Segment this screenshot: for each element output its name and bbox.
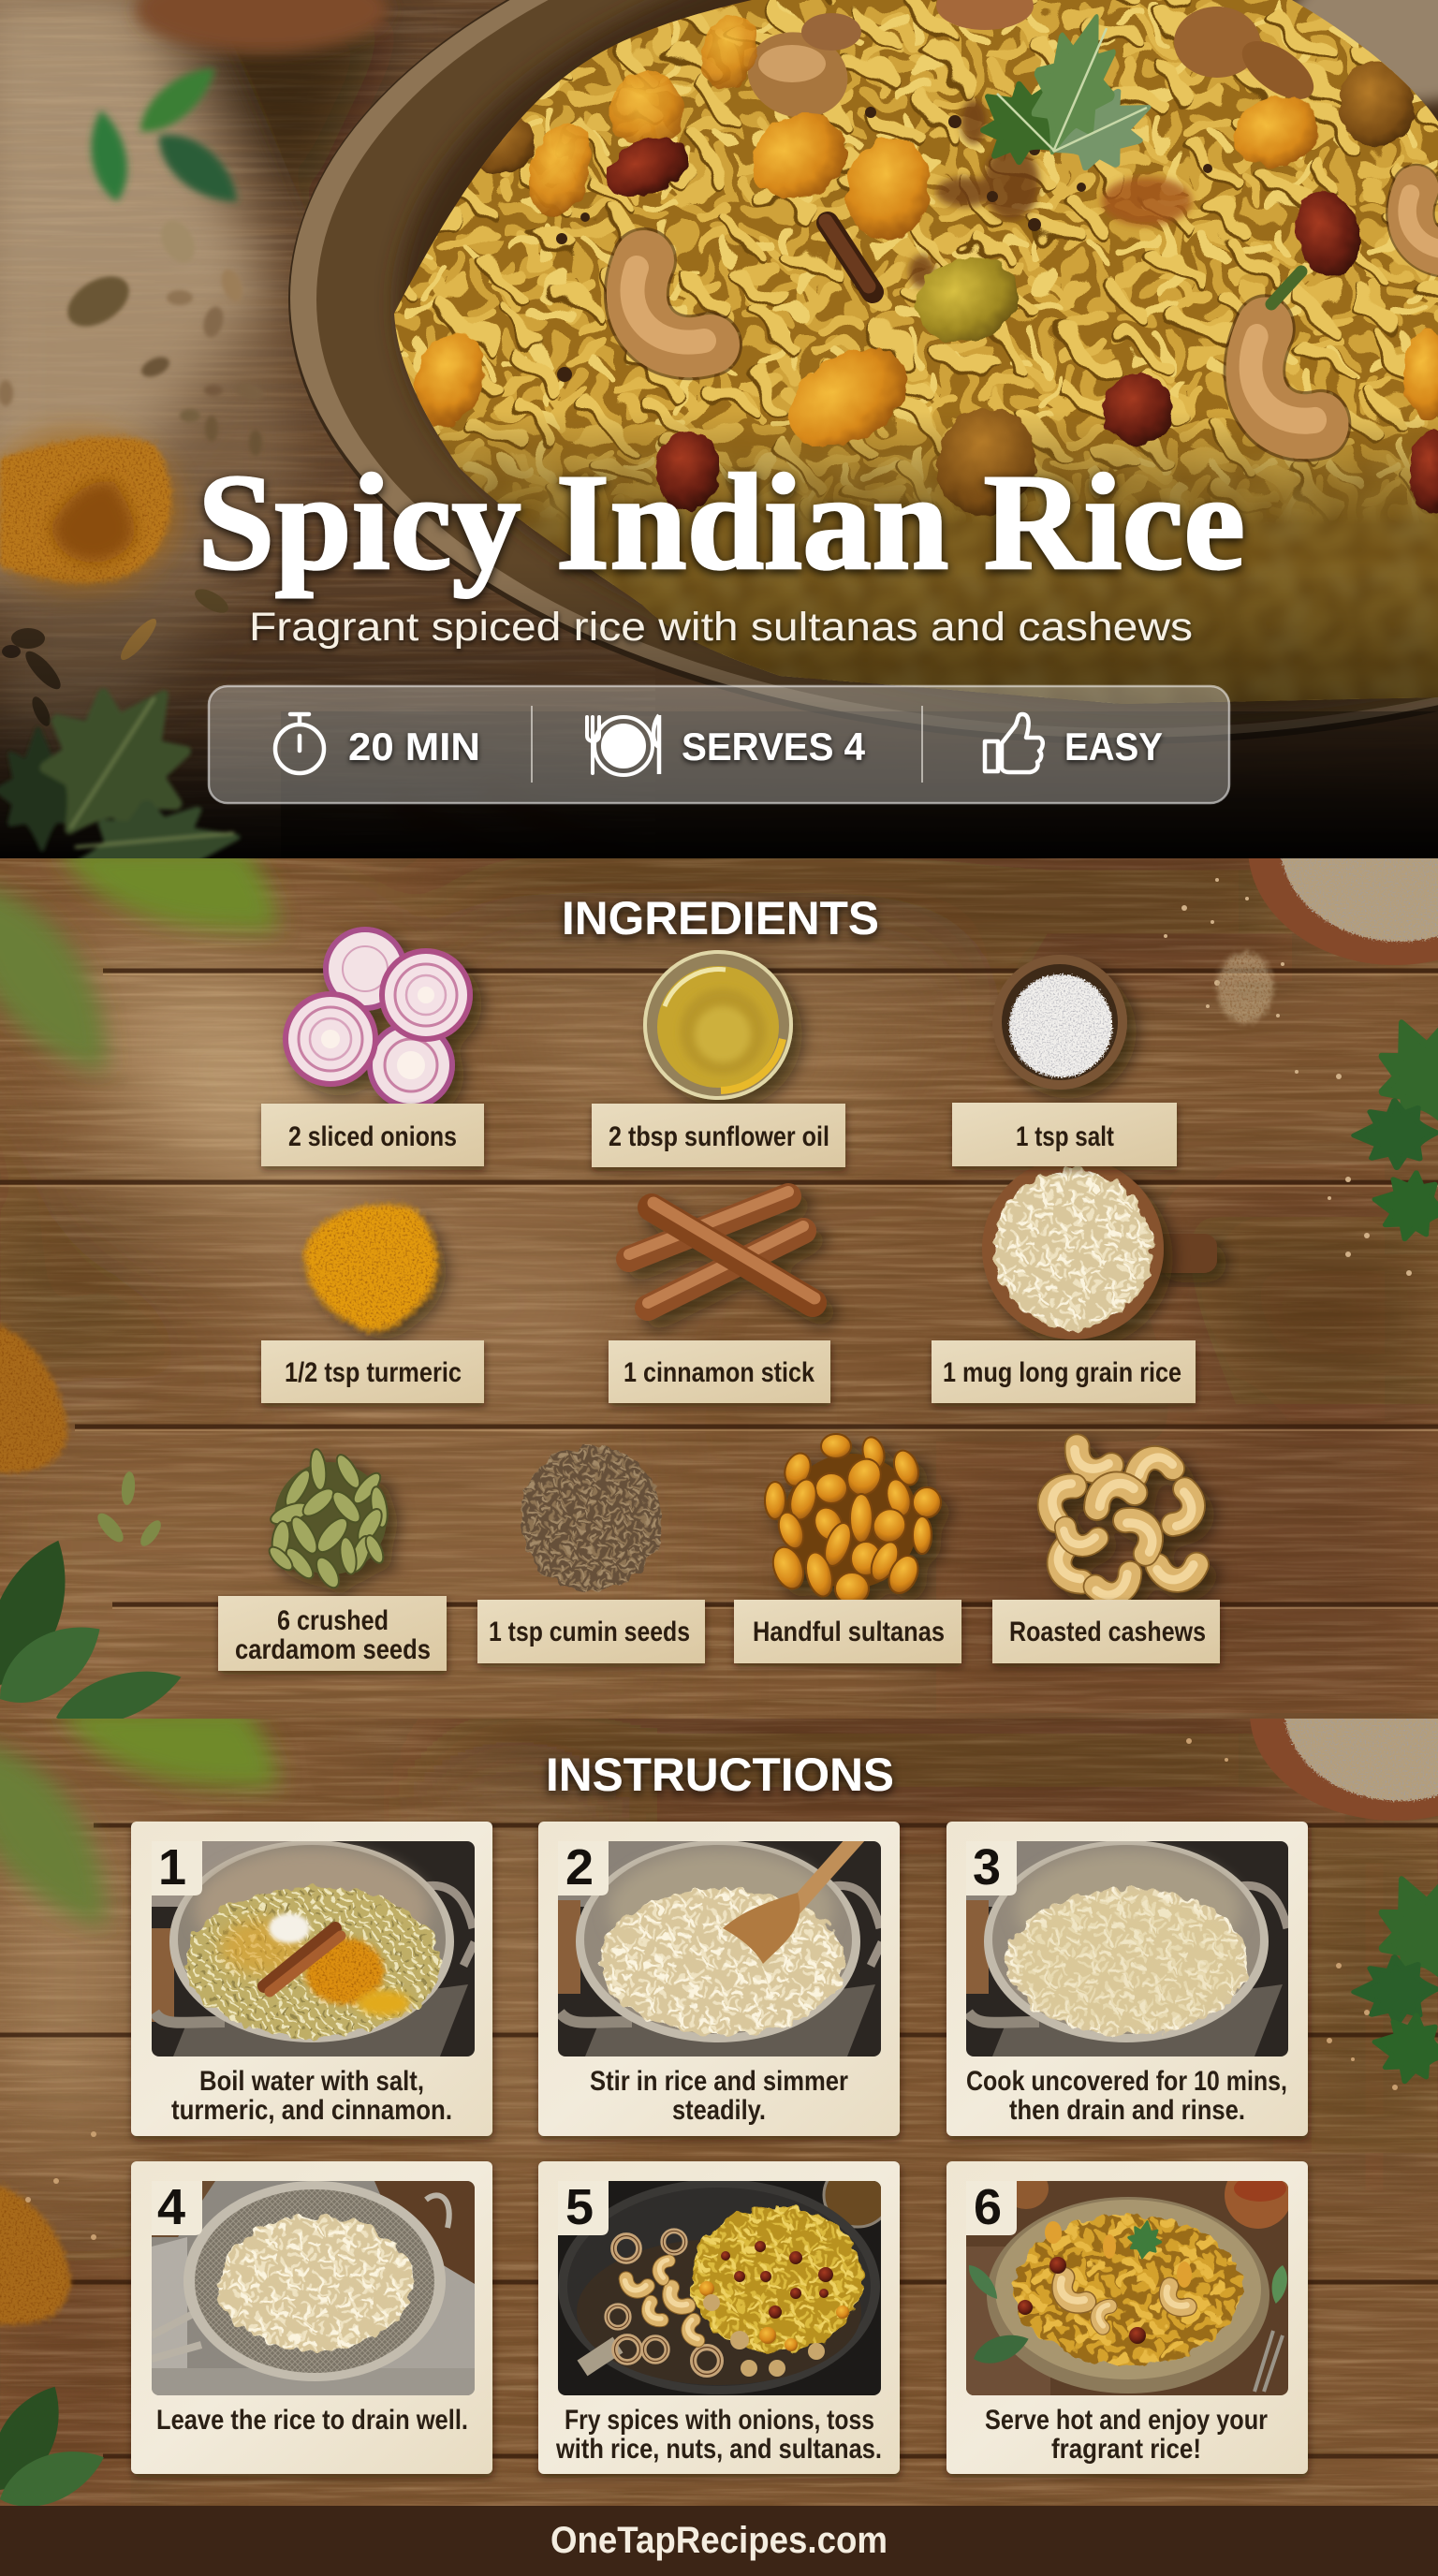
icon: cumin seeds — [521, 1445, 663, 1591]
footer band — [0, 2506, 1438, 2576]
serves 4: SERVES 4 — [682, 724, 866, 768]
fried onions and cashews — [607, 2231, 825, 2377]
blurred terracotta bowl — [136, 0, 389, 52]
label: onions: 2 sliced onions — [288, 1121, 457, 1152]
icon: cardamom pods — [266, 1448, 390, 1591]
number 6 tab — [966, 2179, 1017, 2235]
label: cashews: Roasted cashews — [1009, 1617, 1206, 1647]
number 2 tab — [558, 1839, 609, 1895]
scattered specks — [1164, 878, 1412, 1276]
label: cumin — [477, 1600, 705, 1663]
label: turmeric: 1/2 tsp turmeric — [285, 1357, 462, 1388]
blurred green sprig — [86, 66, 242, 206]
step 6 caption — [985, 2405, 1268, 2465]
dark raisins — [596, 126, 697, 209]
subtitle: Fragrant spiced rice with sultanas and cashews — [249, 605, 1193, 650]
scattered spice seeds — [0, 214, 266, 456]
label: turmeric — [261, 1340, 484, 1403]
wooden bowl — [288, 0, 1438, 744]
step 6 photo — [963, 2161, 1292, 2395]
label: sunflower oil: 2 tbsp sunflower oil — [609, 1121, 829, 1152]
scattered specks — [25, 1738, 1398, 2240]
right herb — [1353, 1004, 1438, 1245]
label: cinnamon: 1 cinnamon stick — [624, 1357, 814, 1388]
bay leaves — [0, 1529, 188, 1738]
loose seeds — [2, 584, 232, 728]
step 2 caption — [590, 2066, 848, 2126]
number 3 tab — [966, 1839, 1017, 1895]
step 5 card — [538, 2161, 900, 2474]
step 4 card — [131, 2161, 492, 2474]
instructions panel — [0, 1605, 1438, 2520]
label: rice: 1 mug long grain rice — [943, 1357, 1181, 1388]
icon: onion slices — [283, 927, 473, 1109]
title: Spicy Indian Rice — [198, 446, 1245, 598]
icon: cashew pile — [1044, 1438, 1200, 1601]
number 5 tab: 5 — [565, 2179, 594, 2235]
icon: stopwatch — [275, 714, 324, 773]
label: cashews — [992, 1600, 1220, 1663]
step 2 photo — [558, 1835, 882, 2056]
number 6 tab: 6 — [974, 2179, 1002, 2235]
blurred foreground leaves — [0, 1708, 277, 1928]
step 1 card — [131, 1822, 492, 2136]
icon: bowl of sunflower oil — [643, 950, 793, 1100]
dark bottom fade — [0, 562, 1438, 858]
light and shadow on wood — [0, 1719, 1438, 2506]
step 2 card — [538, 1822, 900, 2136]
stats bar — [209, 686, 1229, 803]
icon: bowl of salt — [992, 955, 1127, 1090]
step 3 caption: Cook uncovered for 10 mins, — [966, 2066, 1287, 2097]
step 6 caption: fragrant rice! — [1051, 2434, 1201, 2465]
number 4 tab — [152, 2179, 202, 2235]
icon: thumbs up — [985, 714, 1043, 772]
blurred cinnamon below bowl — [403, 796, 637, 871]
20 min: 20 MIN — [348, 724, 480, 768]
cardamom pods — [94, 1471, 165, 1549]
step 5 caption: with rice, nuts, and sultanas. — [555, 2434, 882, 2465]
label: sunflower oil — [592, 1104, 845, 1167]
left turmeric pile — [0, 1320, 67, 1473]
label: sultanas: Handful sultanas — [753, 1617, 945, 1647]
step 3 caption: then drain and rinse. — [1009, 2095, 1245, 2126]
step 6 card — [946, 2161, 1308, 2474]
bay leaves — [0, 2374, 112, 2520]
easy: EASY — [1064, 724, 1163, 768]
ingredients panel — [0, 729, 1438, 1738]
spice dust — [909, 99, 1192, 288]
label: cardamom — [218, 1596, 447, 1671]
green herb fleck — [1271, 271, 1301, 304]
plank seams — [0, 971, 1438, 1604]
cashews — [632, 260, 710, 347]
ingredients heading: INGREDIENTS — [562, 892, 879, 944]
footer url: OneTapRecipes.com — [550, 2520, 888, 2561]
step 5 caption: Fry spices with onions, toss — [565, 2405, 874, 2436]
corner bowl — [1250, 1605, 1438, 1821]
golden sultanas — [405, 9, 1438, 528]
right herb — [1353, 1861, 1438, 2087]
hero panel — [0, 0, 1438, 914]
icon: mug of rice — [982, 1158, 1217, 1339]
number 1 tab — [152, 1839, 202, 1895]
icon: turmeric powder — [304, 1205, 436, 1330]
corner bowl — [1248, 729, 1438, 965]
step 1 caption: Boil water with salt, — [199, 2066, 424, 2097]
label: onions — [261, 1104, 484, 1166]
step 1 caption — [171, 2066, 452, 2126]
coriander garnish — [961, 7, 1164, 185]
turmeric pile — [0, 426, 183, 594]
rice pile — [318, 0, 1438, 749]
step 5 photo — [558, 2163, 891, 2395]
step 3 card — [946, 1822, 1308, 2136]
label: cumin: 1 tsp cumin seeds — [489, 1617, 690, 1647]
cinnamon chip — [828, 223, 873, 292]
left turmeric pile — [0, 2181, 70, 2325]
number 3 tab: 3 — [973, 1839, 1001, 1895]
instructions heading: INSTRUCTIONS — [546, 1749, 894, 1801]
step 1 photo — [152, 1840, 475, 2056]
number 2 tab: 2 — [565, 1839, 594, 1895]
number 5 tab — [558, 2179, 609, 2235]
plank seams — [0, 1825, 1438, 2456]
light and shadow on wood — [0, 858, 1438, 1713]
number 1 tab: 1 — [158, 1839, 186, 1895]
label: cardamom: cardamom seeds — [235, 1634, 431, 1665]
label: salt: 1 tsp salt — [1016, 1121, 1114, 1152]
label: rice — [932, 1340, 1196, 1403]
number 4 tab: 4 — [157, 2179, 185, 2235]
icon: plate and cutlery — [587, 715, 659, 775]
step 2 caption: Stir in rice and simmer — [590, 2066, 848, 2097]
icon: cinnamon sticks — [629, 1192, 814, 1308]
label: cardamom: 6 crushed — [277, 1605, 389, 1636]
blurred foreground leaves — [0, 847, 277, 1072]
step 3 caption — [966, 2066, 1287, 2126]
label: cinnamon — [609, 1340, 830, 1403]
step 5 caption — [555, 2405, 882, 2465]
salt scatter — [1217, 952, 1273, 1023]
step 4 caption: Leave the rice to drain well. — [156, 2405, 468, 2436]
sunlight on table — [0, 0, 393, 749]
step 4 photo — [152, 2181, 475, 2395]
label: sultanas — [734, 1600, 961, 1663]
step 6 caption: Serve hot and enjoy your — [985, 2405, 1268, 2436]
icon: sultanas pile — [765, 1434, 941, 1604]
label: salt — [952, 1103, 1177, 1166]
step 1 caption: turmeric, and cinnamon. — [171, 2095, 452, 2126]
ingredient labels — [218, 1103, 1220, 1671]
bottom-left herb leaves — [0, 654, 242, 914]
step 3 photo — [966, 1840, 1288, 2056]
step 2 caption: steadily. — [672, 2095, 766, 2126]
